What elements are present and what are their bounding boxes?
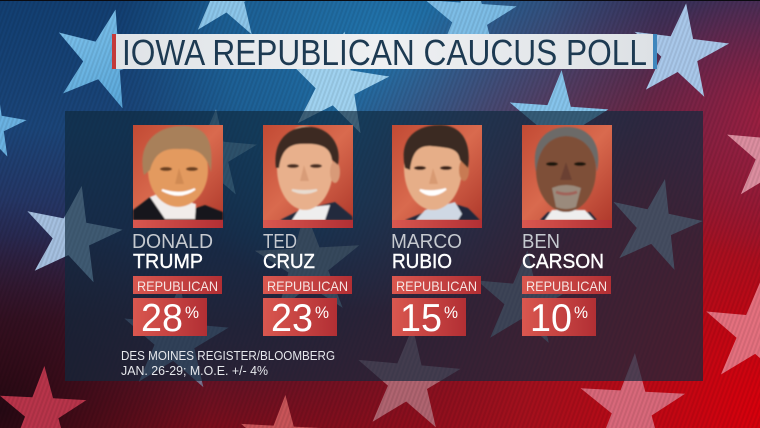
panel: dark results backdrop: [65, 111, 703, 381]
panel: candidate Ted Cruz: [263, 125, 353, 340]
party tag: REPUBLICAN: [526, 278, 607, 294]
title bar: [112, 32, 657, 73]
poll value 23%: 23: [271, 297, 313, 340]
panel: candidate Ben Carson: [522, 125, 612, 340]
name: TED: [263, 230, 297, 253]
poll value 28%: %: [185, 303, 199, 322]
name: DONALD: [132, 230, 213, 253]
poll value 15%: %: [444, 303, 458, 322]
panel: candidate Marco Rubio: RUBIO: [392, 250, 452, 273]
portrait: Cruz: [263, 125, 353, 220]
poll value 10%: %: [574, 303, 588, 322]
poll value 28%: [133, 297, 207, 340]
source note: DES MOINES REGISTER/BLOOMBERG: [121, 348, 335, 363]
portrait: Rubio: [392, 125, 482, 220]
poll value 23%: %: [315, 303, 329, 322]
panel: candidate Ben Carson: CARSON: [522, 250, 604, 273]
name: BEN: [522, 230, 560, 253]
name: MARCO: [391, 230, 462, 253]
portrait: Trump: [133, 125, 223, 220]
poll value 28%: 28: [141, 297, 183, 340]
poll value 10%: 10: [530, 297, 572, 340]
poll value 10%: [522, 297, 596, 340]
party tag: REPUBLICAN: [396, 278, 477, 294]
poll value 15%: 15: [400, 297, 442, 340]
panel: candidate Marco Rubio: [391, 125, 482, 340]
panel: candidate Donald Trump: TRUMP: [133, 250, 203, 273]
party tag: REPUBLICAN: [267, 278, 348, 294]
panel: candidate Ted Cruz: CRUZ: [263, 250, 315, 273]
poll value 15%: [392, 297, 466, 340]
panel: candidate Donald Trump: [132, 125, 223, 340]
party tag: REPUBLICAN: [137, 278, 218, 294]
portrait: Carson: [522, 125, 612, 220]
title: IOWA REPUBLICAN CAUCUS POLL: [122, 32, 647, 73]
poll value 23%: [263, 297, 337, 340]
source note: JAN. 26-29; M.O.E. +/- 4%: [121, 363, 268, 378]
source note: [121, 348, 335, 378]
